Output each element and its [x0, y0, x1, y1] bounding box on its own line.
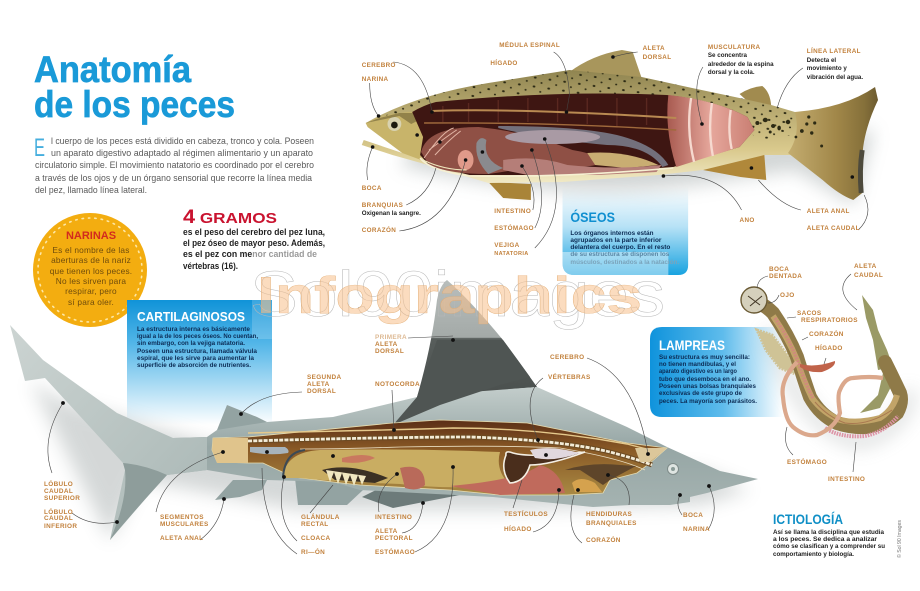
lamprey labels: HÍGADO	[815, 343, 843, 352]
shark notochord	[248, 428, 660, 452]
shark labels: TESTÍCULOS	[504, 509, 548, 518]
shark labels: CAUDAL	[44, 515, 73, 522]
panel: óseos: delantera del cuerpo. En el resto	[570, 244, 670, 251]
trout labels: VEJIGA	[494, 242, 520, 249]
shark labels: CORAZÓN	[586, 535, 621, 544]
panel: lampreas: LAMPREAS	[659, 337, 725, 353]
intro text: a través de los ojos y de un órgano sensorial que recorre la línea media	[35, 173, 313, 183]
trout labels: Oxigenan la sangre.	[362, 210, 421, 217]
callout: 4 gramos: el pez óseo de mayor peso. Además,	[183, 238, 325, 248]
trout labels: MÉDULA ESPINAL	[499, 40, 560, 49]
panel: cartilaginosos: La estructura interna es básicamente	[137, 326, 250, 333]
shark labels: PRIMERA	[375, 334, 407, 341]
callout: 4 gramos: 4 GRAMOS	[183, 207, 277, 228]
shark labels: SEGUNDA	[307, 374, 341, 381]
trout labels: DORSAL	[643, 54, 671, 61]
trout dorsal cavity ribs	[443, 98, 647, 126]
panel: lampreas	[650, 327, 783, 417]
panel: cartilaginosos: Poseen una estructura, llamada válvula	[137, 348, 257, 355]
panel: ictiología	[773, 512, 885, 558]
trout labels: LÍNEA LATERAL	[807, 46, 861, 55]
panel: narinas badge: Es el nombre de las	[52, 245, 130, 255]
shark labels: BRANQUIALES	[586, 520, 637, 527]
shark vertebrae	[248, 437, 652, 470]
lamprey leader lines	[757, 274, 857, 472]
title: de los peces	[34, 84, 235, 125]
trout labels: ALETA CAUDAL	[807, 225, 860, 232]
title: Anatomía	[34, 49, 191, 90]
trout labels: ANO	[740, 217, 755, 224]
illustration: trout	[362, 50, 878, 248]
panel: narinas badge: sí para oler.	[68, 297, 114, 307]
shark labels: ESTÓMAGO	[375, 547, 415, 556]
trout fins	[488, 50, 771, 200]
callout: 4 gramos	[183, 207, 325, 271]
lamprey tail fin	[862, 295, 893, 370]
shark labels: RI—ÓN	[301, 547, 325, 556]
panel: ictiología: cómo se clasifican y a comprender su	[773, 543, 885, 550]
trout labels: INTESTINO	[494, 208, 531, 215]
panel: lampreas: Poseen unas bolsas branquiales	[659, 383, 756, 390]
panel: ictiología: ICTIOLOGÍA	[773, 512, 843, 527]
shark labels: DORSAL	[375, 348, 404, 355]
panel: cartilaginosos: igual a la de los peces óseos. No cuentan,	[137, 333, 258, 340]
trout labels: ESTÓMAGO	[494, 223, 534, 232]
shark muscle block	[212, 438, 248, 463]
lamprey labels: CORAZÓN	[809, 329, 844, 338]
shark labels: CAUDAL	[44, 488, 73, 495]
callout: 4 gramos: vértebras (16).	[183, 261, 238, 271]
shark shadow	[30, 380, 750, 540]
lamprey labels: CAUDAL	[854, 272, 883, 279]
lamprey labels: INTESTINO	[828, 476, 865, 483]
panel: cartilaginosos: sin embargo, con la vejiga natatoria.	[137, 340, 245, 347]
trout labels: dorsal y la cola.	[708, 69, 755, 76]
lamprey liver	[800, 361, 835, 372]
panel: óseos: de su estructura se disponen los	[570, 251, 670, 258]
shark labels: PECTORAL	[375, 535, 413, 542]
trout spots	[366, 70, 795, 140]
shark leader lines	[48, 336, 714, 554]
trout labels: BRANQUIAS	[362, 202, 403, 209]
trout pointer dots	[371, 55, 854, 179]
shark labels: RECTAL	[301, 521, 329, 528]
shark labels: MUSCULARES	[160, 521, 209, 528]
panel: cartilaginosos	[127, 300, 272, 425]
trout labels: vibración del agua.	[807, 74, 863, 81]
trout labels: CEREBRO	[362, 62, 396, 69]
panel: narinas badge: respirar, pero	[65, 286, 117, 296]
panel: lampreas: no tienen mandíbulas, y el	[659, 361, 736, 368]
panel: ictiología: a los peces. Se dedica a analizar	[773, 536, 878, 543]
shark labels: INFERIOR	[44, 523, 77, 530]
callout: 4 gramos: es el peso del cerebro del pez luna,	[183, 227, 325, 237]
shark labels: DORSAL	[307, 388, 336, 395]
shark first dorsal shade over body	[393, 340, 530, 425]
lamprey labels: OJO	[780, 292, 795, 299]
shark labels: INTESTINO	[375, 514, 412, 521]
trout labels: ALETA	[643, 45, 665, 52]
lamprey lower fin	[860, 373, 892, 413]
lamprey labels: SACOS	[797, 310, 822, 317]
trout organs	[420, 126, 673, 176]
lamprey body	[754, 300, 901, 427]
panel: lampreas: tubo que desemboca en el ano.	[659, 376, 751, 383]
panel: narinas badge: No les sirven para	[56, 276, 126, 286]
panel: lampreas: Su estructura es muy sencilla:	[659, 354, 750, 361]
title	[34, 49, 235, 125]
lamprey labels: DENTADA	[769, 273, 802, 280]
intro text	[34, 134, 314, 195]
shark tail	[10, 325, 207, 540]
illustration: shark	[10, 280, 758, 554]
panel: lampreas: exclusivas de este grupo de	[659, 390, 742, 397]
panel: cartilaginosos: CARTILAGINOSOS	[137, 310, 245, 324]
trout labels	[362, 40, 863, 257]
shark labels: SEGMENTOS	[160, 514, 204, 521]
panel: óseos: Los órganos internos están	[570, 230, 654, 237]
intro text: l cuerpo de los peces está dividido en cabeza, tronco y cola. Poseen	[51, 136, 314, 146]
lamprey head disc	[741, 287, 767, 313]
panel: óseos: ÓSEOS	[570, 208, 615, 225]
shark labels: ALETA	[307, 381, 330, 388]
trout labels: CORAZÓN	[362, 225, 396, 234]
panel: narinas badge	[33, 213, 147, 327]
shark labels: CLOACA	[301, 535, 330, 542]
panel: óseos	[563, 187, 688, 275]
shark labels: HÍGADO	[504, 524, 532, 533]
shark labels: ALETA	[375, 528, 398, 535]
shark labels: SUPERIOR	[44, 495, 80, 502]
trout labels: Se concentra	[708, 52, 747, 59]
lamprey labels: ALETA	[854, 263, 877, 270]
lamprey labels: BOCA	[769, 266, 789, 273]
shark labels: ALETA ANAL	[160, 535, 203, 542]
shark labels: ALETA	[375, 341, 398, 348]
panel: cartilaginosos: espiral, que les sirve para aumentar la	[137, 355, 254, 362]
intro text: del pez, llamado línea lateral.	[35, 185, 147, 195]
lamprey labels: RESPIRATORIOS	[801, 317, 858, 324]
shark body cavity	[212, 420, 667, 495]
trout head	[366, 112, 423, 160]
trout leader lines	[367, 52, 868, 248]
shark labels: VÉRTEBRAS	[548, 372, 591, 381]
trout labels: ALETA ANAL	[807, 208, 850, 215]
panel: ictiología: comportamiento y biología.	[773, 551, 854, 558]
trout tail	[788, 87, 878, 200]
shark labels: NARINA	[683, 526, 710, 533]
lamprey gills	[757, 330, 795, 373]
lamprey labels	[769, 263, 883, 483]
trout labels: BOCA	[362, 185, 382, 192]
panel: óseos: músculos, destinados a la natación.	[570, 259, 679, 266]
callout: 4 gramos: es el pez con menor cantidad de	[183, 249, 317, 259]
trout spinal cord	[432, 110, 676, 118]
illustration: lamprey	[741, 274, 910, 472]
trout labels: alrededor de la espina	[708, 61, 774, 68]
trout lateral stripe	[424, 123, 676, 130]
panel: lampreas: peces. La mayoría son parásitos.	[659, 398, 757, 405]
trout labels: Detecta el	[807, 57, 836, 64]
trout body cavity	[412, 94, 754, 175]
shark pointer dots	[61, 338, 711, 524]
shark labels: GLÁNDULA	[301, 512, 340, 521]
shark labels: LÓBULO	[44, 507, 73, 516]
shark fins	[215, 405, 470, 508]
trout labels: movimiento y	[807, 65, 847, 72]
trout body	[362, 70, 815, 183]
trout shadow	[399, 130, 874, 205]
lamprey shadow	[770, 330, 910, 442]
panel: lampreas: aparato digestivo es un largo	[659, 368, 737, 375]
lamprey stomach and intestine	[783, 362, 883, 435]
trout labels: NARINA	[362, 76, 388, 83]
trout labels: NATATORIA	[494, 251, 529, 257]
shark labels	[44, 334, 710, 556]
trout labels: HÍGADO	[490, 58, 518, 67]
panel: narinas badge: que tienen los peces.	[50, 266, 132, 276]
watermark: Infographics: Infographics	[257, 267, 642, 325]
panel: ictiología: Así se llama la disciplina que estudia	[773, 529, 884, 536]
shark organs	[283, 448, 667, 495]
intro text: un aparato digestivo adaptado al régimen alimentario y un aparato	[51, 148, 313, 158]
panel: óseos: agrupados en la parte inferior	[570, 237, 662, 244]
shark labels: HENDIDURAS	[586, 511, 632, 518]
panel: narinas badge: NARINAS	[66, 230, 116, 242]
copyright: © Sol 90 Images	[896, 520, 903, 558]
lamprey labels: ESTÓMAGO	[787, 457, 827, 466]
watermark: Sol90images: Sol90images	[250, 258, 665, 330]
shark first dorsal fin	[417, 280, 537, 397]
shark labels: NOTOCORDA	[375, 381, 420, 388]
shark kidney	[250, 447, 289, 454]
lamprey inner organs	[773, 316, 898, 436]
shark body	[130, 387, 758, 507]
panel: cartilaginosos: superficie de absorción de nutrientes.	[137, 362, 251, 369]
shark labels: BOCA	[683, 512, 703, 519]
panel: narinas badge: aberturas de la nariz	[51, 255, 131, 265]
intro text: circulatorio simple. El movimiento natatorio es coordinado por el cerebro	[35, 160, 314, 170]
shark eye	[668, 464, 678, 474]
trout labels: MUSCULATURA	[708, 44, 760, 51]
trout muscle segments	[667, 95, 754, 167]
shark labels: CEREBRO	[550, 354, 584, 361]
shark labels: LÓBULO	[44, 479, 73, 488]
intro text: E	[34, 134, 45, 162]
